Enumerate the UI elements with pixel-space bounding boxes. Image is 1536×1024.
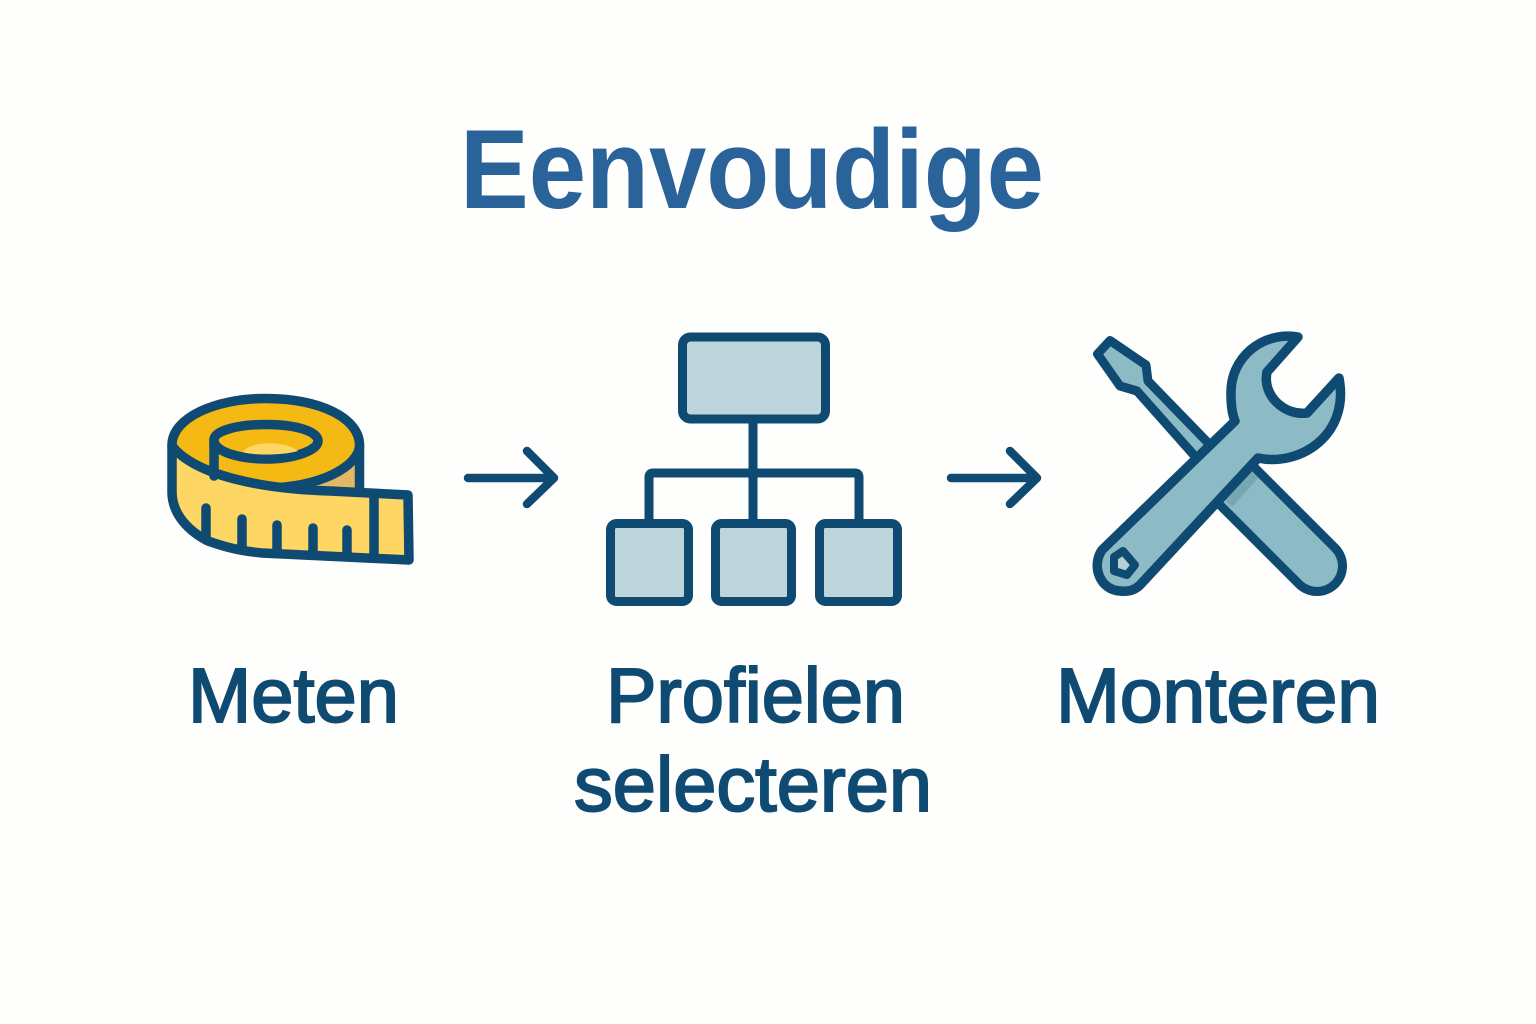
arrow: profielen to monteren bbox=[951, 451, 1037, 504]
label: profielen selecteren bbox=[574, 653, 932, 828]
icon: hierarchy of profiles bbox=[610, 337, 898, 602]
icon: measuring tape bbox=[172, 398, 409, 560]
label: profielen selecteren: selecteren bbox=[574, 742, 932, 828]
icon: screwdriver and wrench bbox=[1097, 336, 1341, 591]
label: profielen selecteren: Profielen bbox=[606, 653, 905, 739]
title: Eenvoudige bbox=[460, 107, 1044, 232]
label: meten: Meten bbox=[188, 653, 399, 739]
label: monteren: Monteren bbox=[1056, 653, 1380, 739]
arrow: meten to profielen bbox=[468, 451, 554, 504]
